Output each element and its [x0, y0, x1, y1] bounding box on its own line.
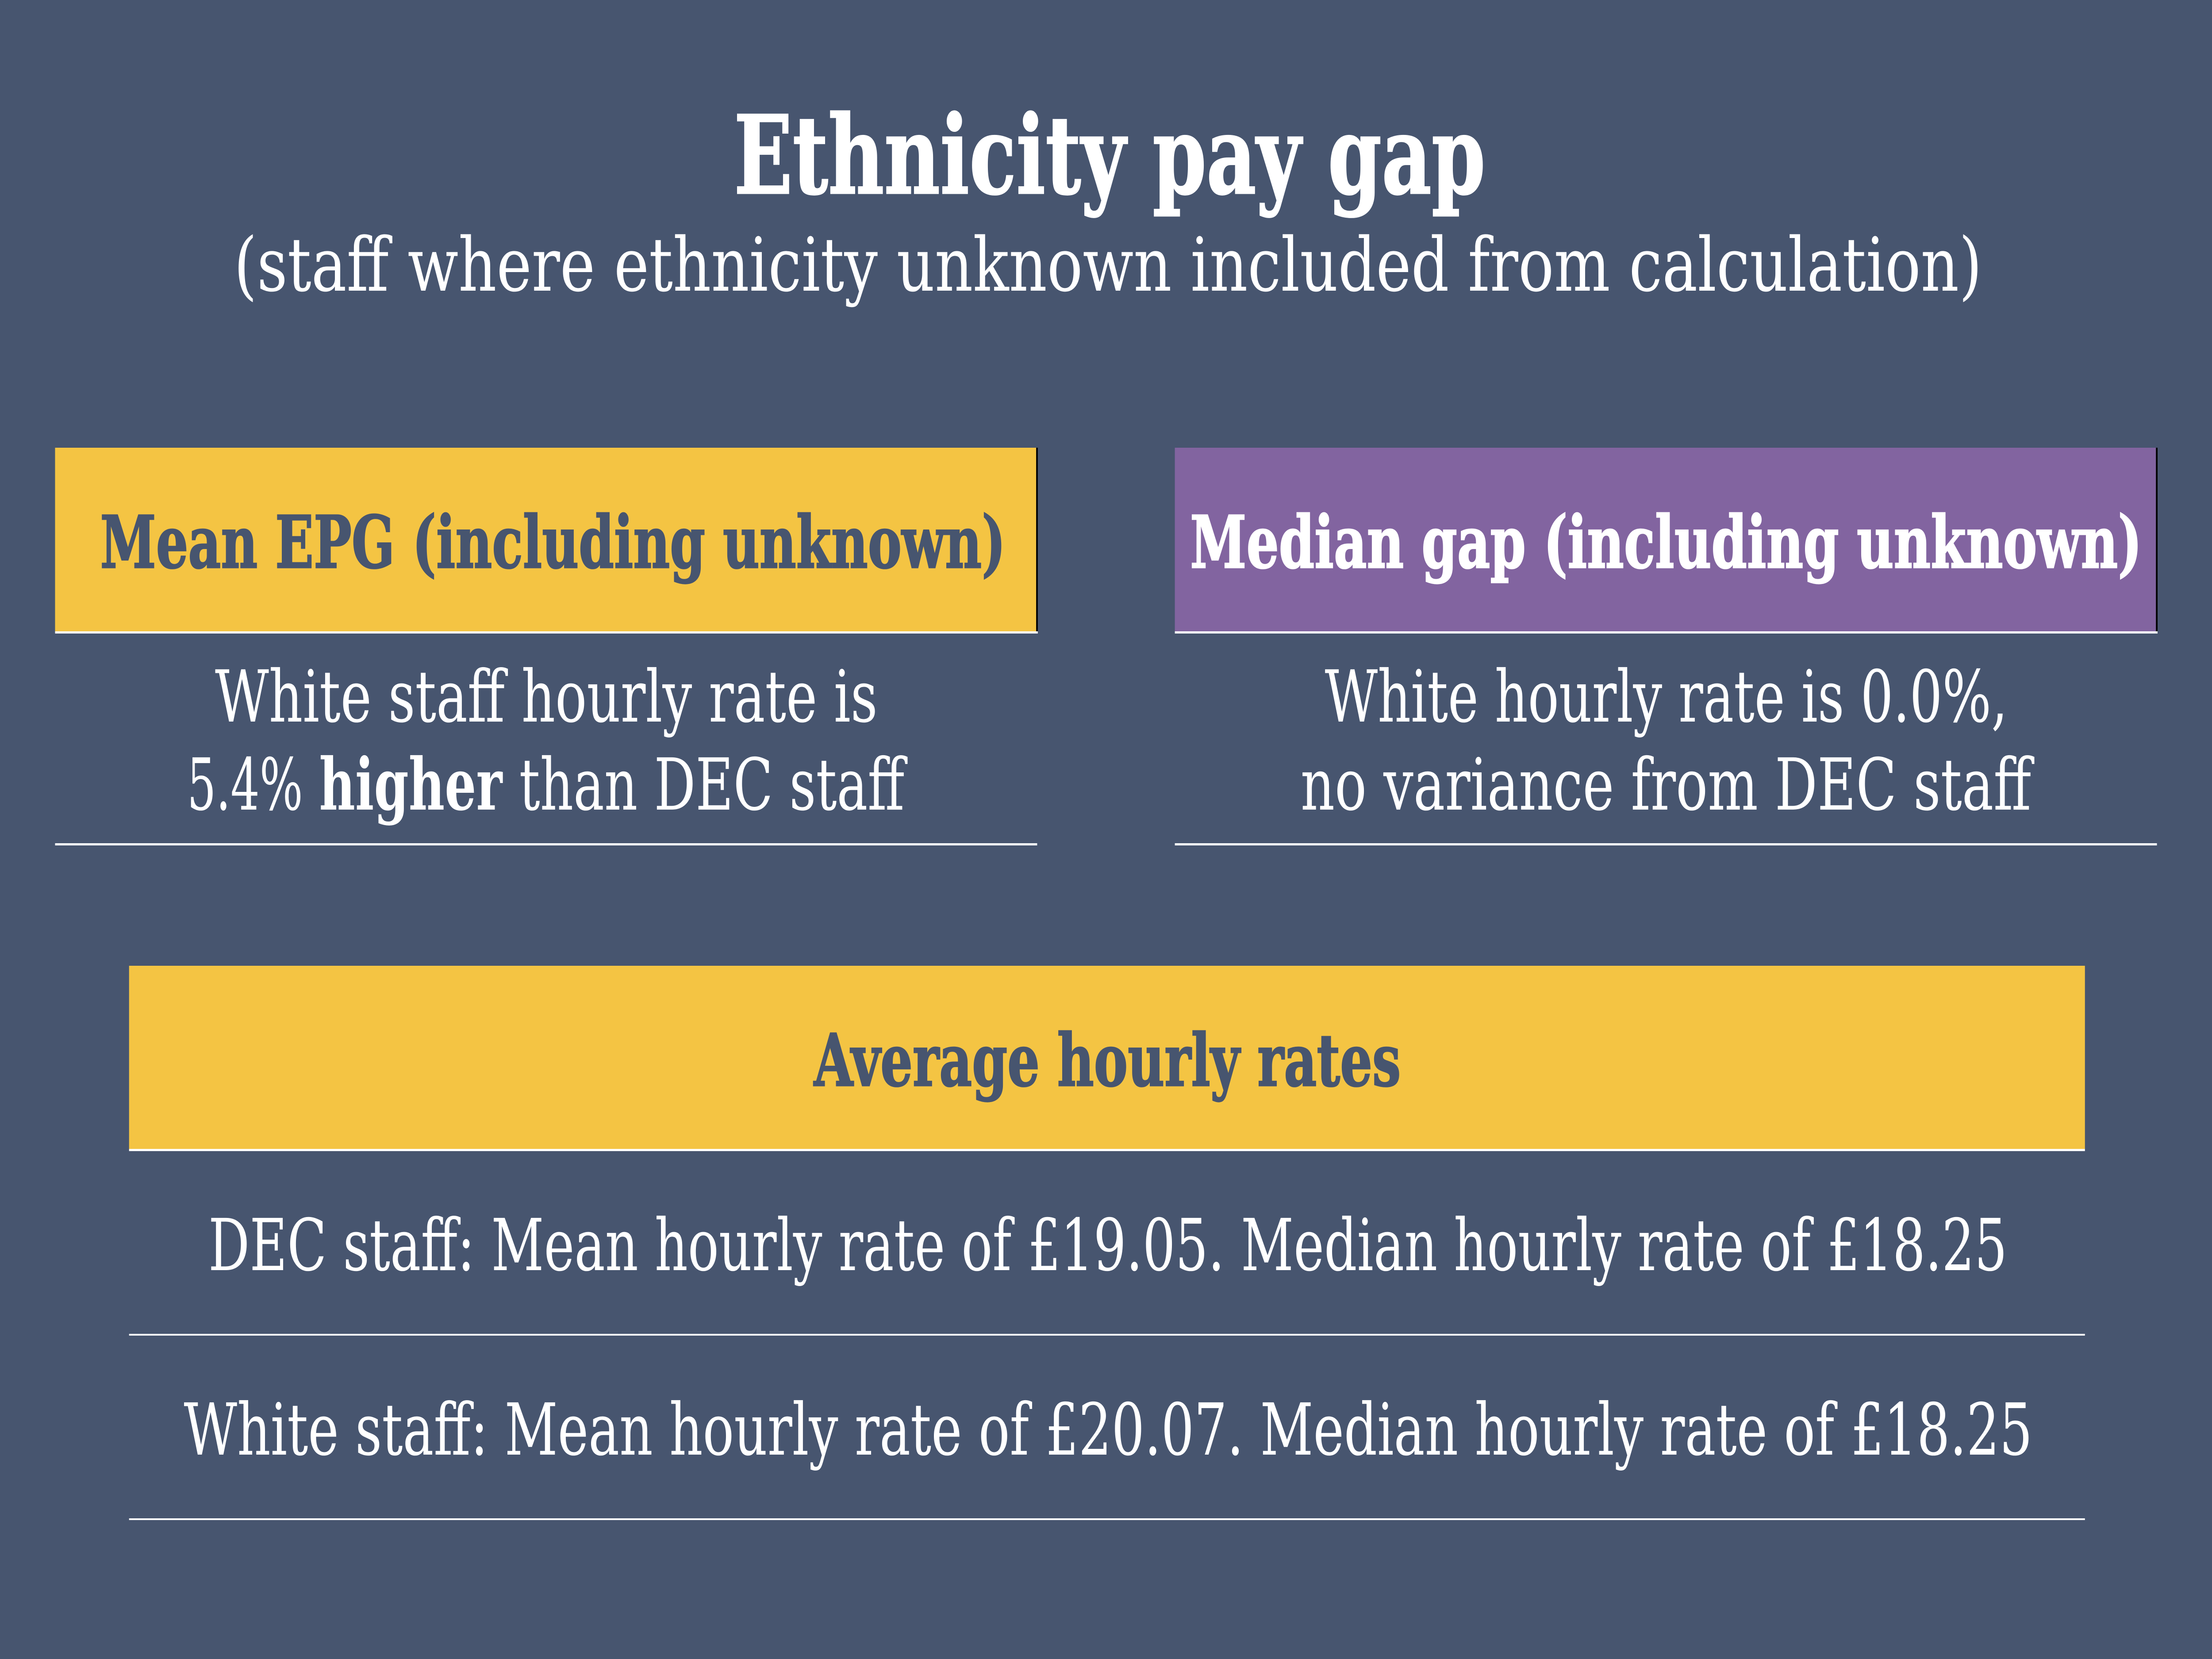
- mean text line 2: [187, 743, 908, 827]
- White staff rates: White staff: Mean hourly rate of £20.07. Median hourly rate of £18.25: [184, 1389, 2032, 1472]
- panel: average hourly rates: [129, 966, 2085, 1520]
- median heading: Median gap (including unknown): [1190, 500, 2142, 585]
- median header bar right edge: [2156, 448, 2158, 631]
- median text line 1: White hourly rate is 0.0%,: [1325, 656, 2008, 739]
- panel: mean EPG: [55, 448, 1038, 845]
- median header underline: [1175, 631, 2158, 634]
- rates header underline: [129, 1149, 2085, 1151]
- mean heading: Mean EPG (including unknown): [100, 500, 1006, 585]
- median header bar: [1175, 448, 2156, 631]
- percentage: 5.4%: [187, 744, 303, 827]
- title: Ethnicity pay gap: [734, 92, 1486, 219]
- mean header bar right edge: [1036, 448, 1038, 631]
- DEC row rule: [129, 1334, 2085, 1336]
- rates heading: Average hourly rates: [813, 1018, 1401, 1103]
- White row rule: [129, 1518, 2085, 1520]
- DEC staff rates: DEC staff: Mean hourly rate of £19.05. Median hourly rate of £18.25: [208, 1204, 2007, 1287]
- rates header bar: [129, 966, 2085, 1149]
- median bottom rule: [1175, 843, 2157, 845]
- mean text line 1: White staff hourly rate is: [215, 656, 878, 739]
- subtitle: (staff where ethnicity unknown included from calculation): [234, 222, 1982, 308]
- median text line 2: no variance from DEC staff: [1301, 744, 2035, 827]
- mean header underline: [55, 631, 1038, 634]
- comparison: than DEC staff: [519, 744, 908, 827]
- panel: median gap: [1175, 448, 2158, 845]
- title block: [234, 92, 1982, 308]
- mean bottom rule: [55, 843, 1037, 845]
- mean header bar: [55, 448, 1036, 631]
- emphasised word: higher: [319, 743, 503, 827]
